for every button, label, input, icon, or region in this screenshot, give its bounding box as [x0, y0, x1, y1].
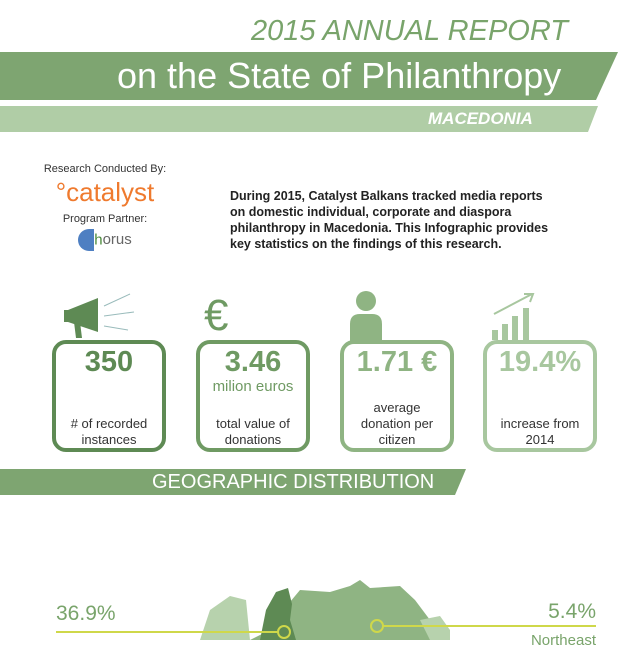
subtitle: Macedonia: MACEDONIA [428, 109, 533, 128]
callout: 5.4% Northeast: 5.4% [548, 600, 596, 623]
stat: 350 recorded instances: instances [82, 432, 136, 447]
banner: state of philanthropy [0, 52, 618, 132]
logo: horus: horus [94, 231, 132, 248]
stat: 3.46 million euros: donations [225, 432, 281, 447]
stat: 1.71 euro average: citizen [379, 432, 415, 447]
icon: euro: € [204, 291, 228, 340]
stat: 1.71 euro average: average [374, 400, 420, 415]
callout: 5.4% Northeast [370, 600, 596, 649]
stat: 350 recorded instances [52, 340, 166, 452]
section heading: geographic distribution [0, 469, 466, 495]
credits block: Program Partner: [63, 213, 147, 225]
stat: 3.46 million euros: 3.46 [225, 346, 281, 378]
intro paragraph: During 2015, Catalyst Balkans tracked media reports on domestic individual, corporate and diaspora philanthropy in Macedonia. This Infographic provides key statistics on the findings of this research. [230, 189, 548, 251]
stat: 3.46 million euros: total value of [216, 416, 290, 431]
logo: catalyst: °catalyst [56, 177, 154, 207]
credits block [44, 163, 166, 251]
stat: 3.46 million euros [196, 340, 310, 452]
icon: megaphone [64, 294, 134, 338]
stat: 19.4% increase [483, 340, 597, 452]
stat: 350 recorded instances: 350 [85, 346, 133, 378]
callout: 36.9% [56, 602, 291, 639]
banner: state of philanthropy: on the State of Philanthropy [117, 55, 561, 96]
logo: horus [78, 229, 132, 251]
stat: 1.71 euro average [340, 340, 454, 452]
map of Macedonia [200, 580, 450, 640]
credits block: Research Conducted By: [44, 163, 166, 175]
stat: 19.4% increase: increase from [501, 416, 579, 431]
icon: person [350, 291, 382, 340]
stat: 19.4% increase: 19.4% [499, 346, 581, 378]
stat: 3.46 million euros: milion euros [213, 378, 293, 395]
text: Northeast [531, 632, 596, 649]
stat: 1.71 euro average: 1.71 € [357, 346, 437, 378]
stat: 350 recorded instances: # of recorded [71, 416, 147, 431]
stat: 19.4% increase: 2014 [526, 432, 554, 447]
title: 2015 annual report: 2015 ANNUAL REPORT [251, 15, 568, 47]
stat: 1.71 euro average: donation per [361, 416, 433, 431]
callout: 36.9%: 36.9% [56, 602, 116, 625]
section heading: geographic distribution: GEOGRAPHIC DISTRIBUTION [152, 471, 434, 493]
icon: growth bars [492, 293, 534, 340]
